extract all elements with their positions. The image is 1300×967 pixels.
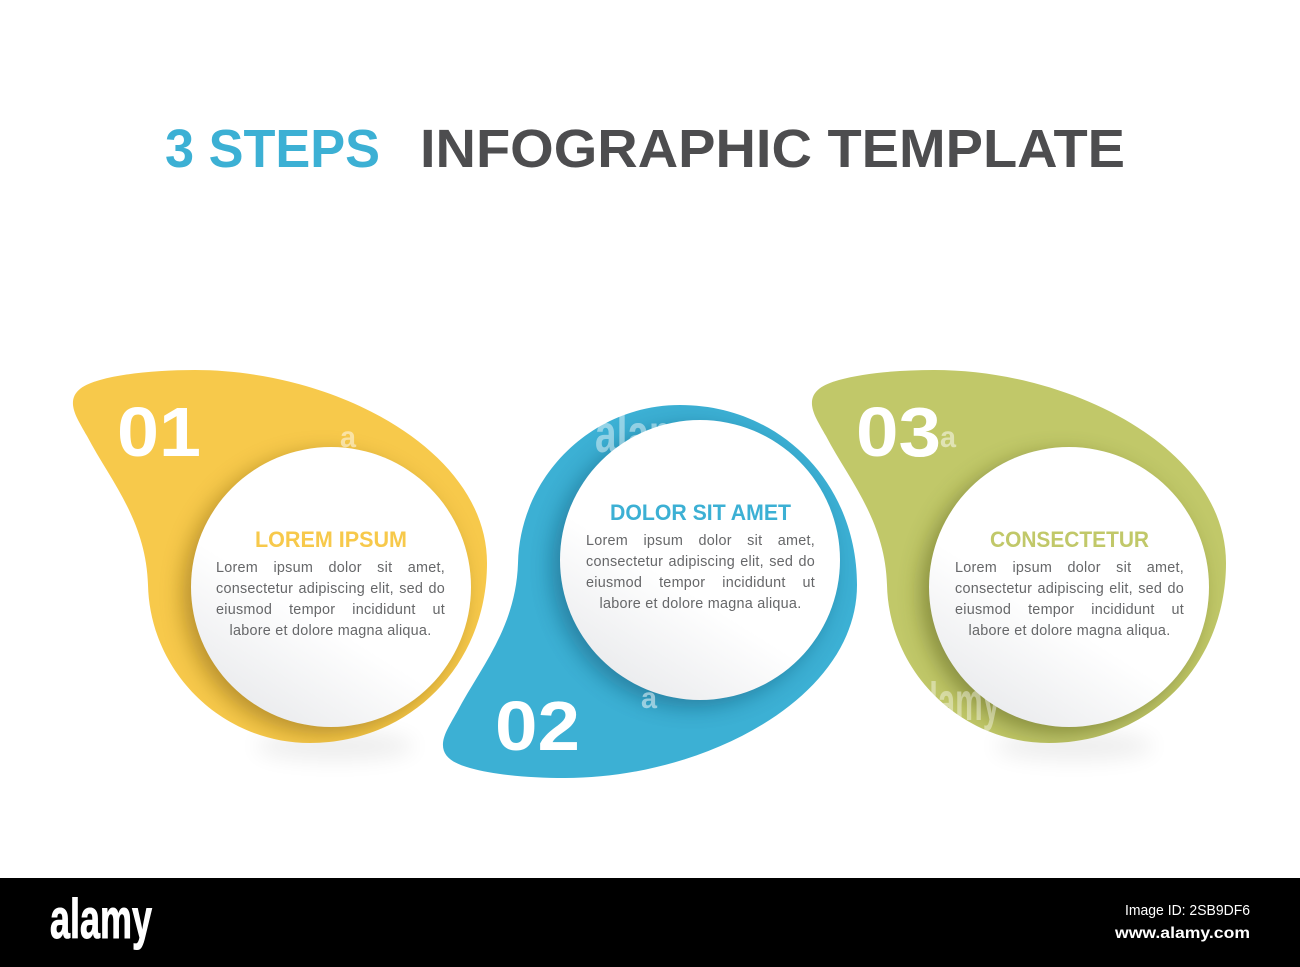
panel: step 02 (443, 404, 857, 778)
panel: step 03 (812, 370, 1226, 760)
green drop shape (812, 370, 1226, 743)
ground shadow (994, 732, 1154, 760)
body text: eiusmod tempor incididunt ut (955, 602, 1184, 618)
watermark word: alamy (595, 404, 705, 464)
body text: Lorem ipsum dolor sit amet, (586, 533, 815, 549)
title (165, 119, 1125, 179)
body text: consectetur adipiscing elit, sed do (955, 581, 1184, 597)
heading: LOREM IPSUM (255, 527, 407, 552)
step number 02: 02 (495, 687, 580, 765)
watermark letter: a (641, 682, 657, 715)
title: 3 steps: 3 STEPS (165, 119, 380, 179)
body text (216, 558, 446, 648)
website: www.alamy.com (1114, 925, 1250, 942)
body text: eiusmod tempor incididunt ut (216, 602, 445, 618)
body text: labore et dolore magna aliqua. (969, 623, 1170, 639)
title: infographic template: INFOGRAPHIC TEMPLATE (420, 119, 1125, 179)
body text: eiusmod tempor incididunt ut (586, 575, 815, 591)
white disc (929, 447, 1209, 727)
body text: Lorem ipsum dolor sit amet, (955, 560, 1184, 576)
body text (586, 531, 816, 621)
heading: DOLOR SIT AMET (610, 500, 792, 525)
watermark letter: a (340, 421, 356, 454)
footer bar (0, 878, 1300, 967)
heading: CONSECTETUR (990, 527, 1149, 552)
image id: Image ID: 2SB9DF6 (1125, 902, 1250, 919)
panel: step 01 (73, 370, 487, 760)
white disc (560, 420, 840, 700)
ground shadow (255, 732, 415, 760)
body text: labore et dolore magna aliqua. (600, 596, 801, 612)
yellow drop shape (73, 370, 487, 743)
step number 01: 01 (117, 393, 201, 471)
disc shadow (183, 454, 463, 734)
white disc (191, 447, 471, 727)
body text: labore et dolore magna aliqua. (230, 623, 431, 639)
body text: consectetur adipiscing elit, sed do (216, 581, 445, 597)
watermark letter: a (940, 421, 956, 454)
body text (955, 558, 1185, 648)
watermark word: alamy (912, 672, 1000, 732)
body text: Lorem ipsum dolor sit amet, (216, 560, 445, 576)
step number 03: 03 (856, 393, 941, 471)
blue drop shape (443, 405, 857, 778)
footer logo: alamy (50, 887, 152, 950)
disc shadow (921, 454, 1201, 734)
body text: consectetur adipiscing elit, sed do (586, 554, 815, 570)
disc shadow (552, 427, 832, 707)
